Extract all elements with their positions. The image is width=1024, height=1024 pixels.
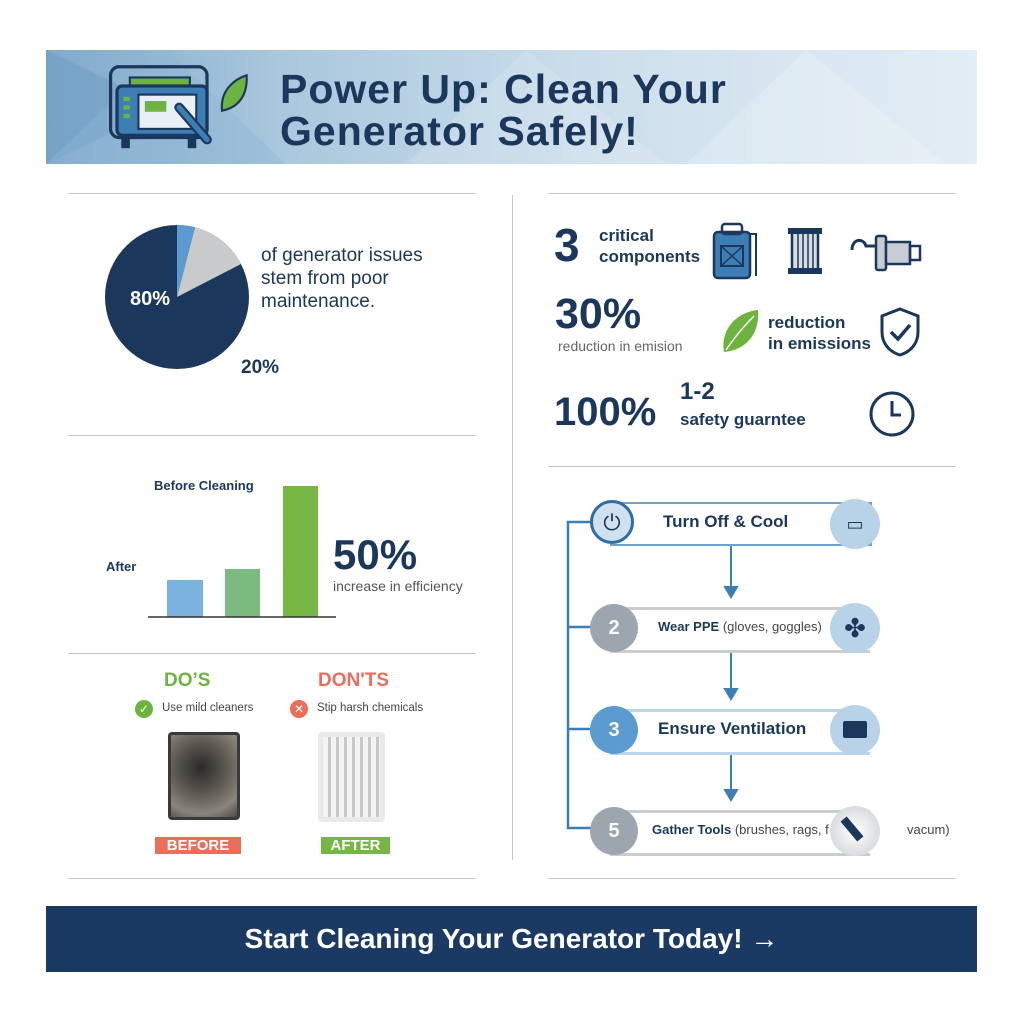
pie label: 20%: 20% [241,357,279,378]
step 5: gather tools: vacum) [907,822,950,837]
pie chart [105,225,249,369]
step 2: wear PPE: 2 [608,617,620,639]
step 3: ensure ventilation: 3 [608,719,620,741]
stat: 50% efficiency [333,531,463,594]
stat: 30%: 30% [555,290,641,338]
icon: shield check [880,307,920,357]
do's column: ✓ [139,702,149,716]
pie chart panel [105,225,423,378]
stats panel: in emissions [768,334,871,353]
don'ts column [290,670,423,854]
stats panel: components [599,247,700,266]
pie chart: 80% [130,288,170,310]
icon: generator with wrench and leaf [108,65,248,148]
footer call to action [46,906,977,972]
step 3: ensure ventilation [590,705,880,755]
stats panel: critical [599,226,654,245]
stat: 3 critical components: 3 [554,219,580,271]
pie description: stem from poor [261,268,389,289]
stat: 50% efficiency: 50% [333,531,417,578]
do's column: Use mild cleaners [162,702,253,714]
header banner [46,50,977,164]
step 5: gather tools [590,806,950,856]
icons: fuel can, filter, spark plug [712,222,922,280]
stats panel: reduction [768,313,845,332]
steps flowchart [566,499,950,856]
don'ts column: AFTER [330,837,380,854]
bar chart: After [106,559,136,574]
stats panel: safety guarntee [680,410,806,429]
step 2: wear PPE: Wear PPE (gloves, goggles) [658,619,822,634]
do's column [135,670,253,854]
stats panel: 1-2 [680,378,715,405]
bar chart: Before Cleaning [154,478,254,493]
icon: clock [870,392,914,436]
stat: 50% efficiency: increase in efficiency [333,578,463,594]
stat: 100% safety: 100% [554,390,656,434]
step 5: gather tools: Gather Tools (brushes, rags, f [652,822,829,837]
do's column: DO’S [164,670,210,691]
title: Power Up: Clean Your [280,66,727,112]
footer call to action: Start Cleaning Your Generator Today! → [245,923,778,954]
step 1: turn off & cool: ▭ [846,514,864,534]
don'ts column: ✕ [294,702,304,716]
bar chart panel [106,478,463,618]
step 1: turn off & cool: ⏻ [603,510,621,535]
pie description: maintenance. [261,291,375,312]
pie description: of generator issues [261,245,423,266]
stats panel: reduction in emision [558,338,683,354]
don'ts column: DON'TS [318,670,389,691]
step 1: turn off & cool: Turn Off & Cool [663,512,788,531]
step 3: ensure ventilation: Ensure Ventilation [658,719,806,738]
do's and don'ts panel [135,670,423,854]
stats panel [554,219,922,436]
title: Generator Safely! [280,108,639,154]
pie description [261,245,423,312]
do's column: BEFORE [167,837,229,854]
bar chart [106,478,336,618]
step 2: wear PPE: ✤ [844,613,866,643]
step 5: gather tools: 5 [608,820,620,842]
step 1: turn off & cool [590,499,880,549]
icon: leaf [723,310,758,352]
step 2: wear PPE [590,603,880,653]
don'ts column: Stip harsh chemicals [317,702,423,714]
title [280,66,727,154]
